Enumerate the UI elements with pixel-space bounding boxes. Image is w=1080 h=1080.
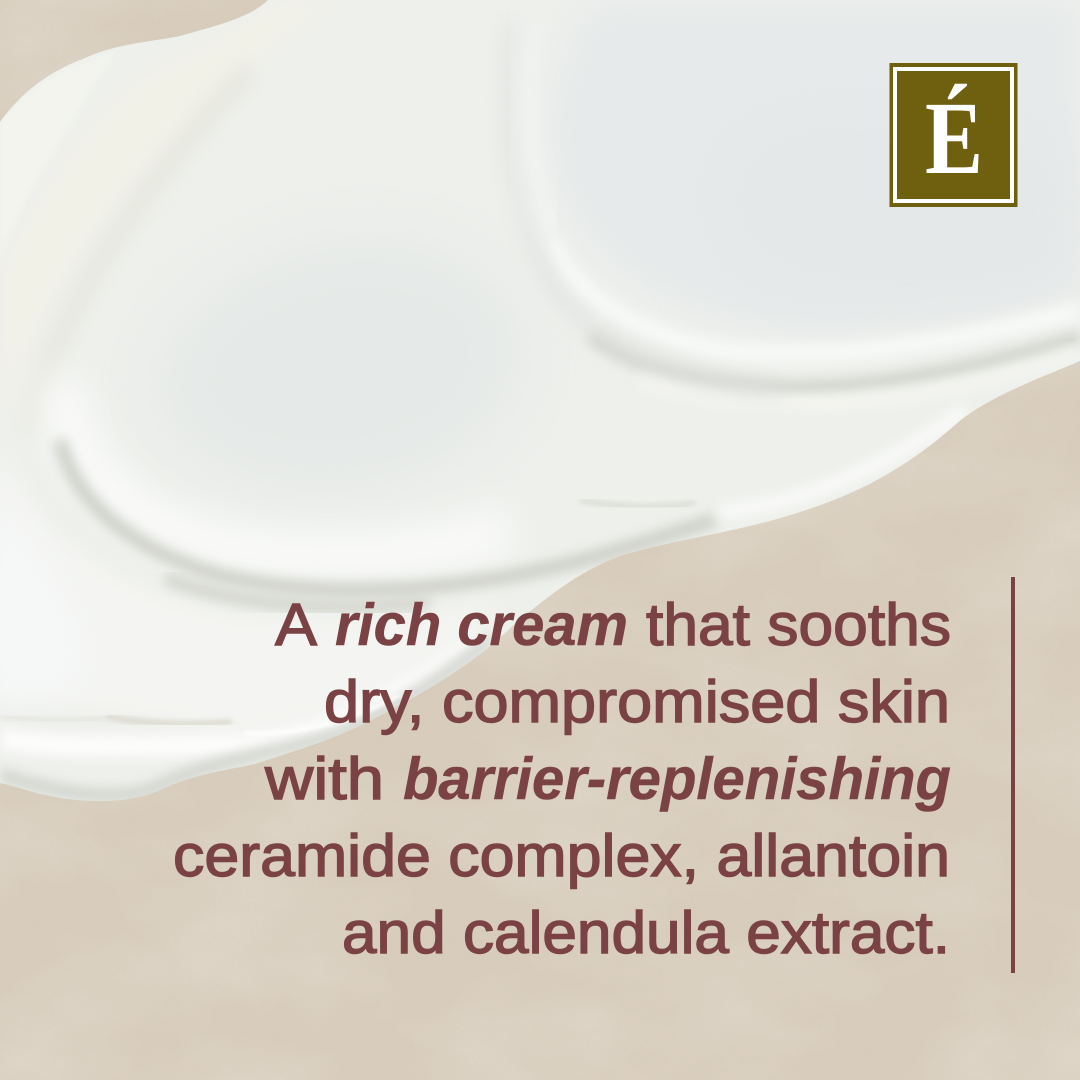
line 1: A xyxy=(275,592,318,658)
line 1: that sooths xyxy=(646,592,951,658)
headline text xyxy=(173,592,951,966)
line 5: and calendula extract. xyxy=(342,900,950,966)
vertical accent bar xyxy=(1011,577,1015,973)
cream swatch xyxy=(0,0,1080,820)
line 3: with xyxy=(264,746,384,812)
lobe: central cream swirl xyxy=(60,20,965,590)
lobe: upper right cream swirl xyxy=(554,46,1080,394)
lobe: left outer ridge xyxy=(28,70,247,416)
line 4: ceramide complex, allantoin xyxy=(173,823,950,889)
lobe: lower left cream swirl xyxy=(0,512,491,801)
line 1: rich cream xyxy=(335,592,628,658)
line 2: dry, compromised skin xyxy=(324,669,950,735)
logo: olive square with É xyxy=(890,63,1018,207)
logo: olive square with É: É xyxy=(925,81,983,196)
line 3: barrier-replenishing xyxy=(403,746,951,812)
line 1 xyxy=(275,592,951,658)
